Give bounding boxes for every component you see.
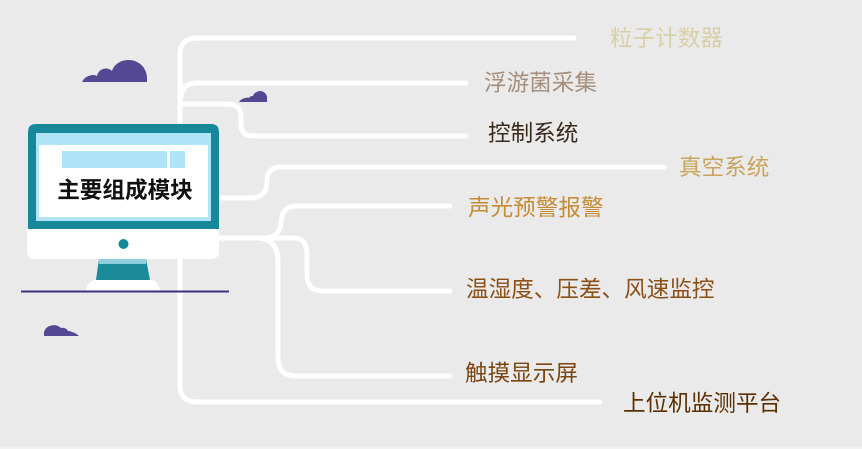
label: 控制系统: 控制系统 — [488, 121, 578, 146]
line: 声光预警报警 — [220, 206, 450, 238]
monitor icon — [27, 124, 219, 291]
line: 浮游菌采集 — [181, 83, 466, 97]
label: 声光预警报警: 声光预警报警 — [468, 196, 604, 220]
label: 上位机监测平台: 上位机监测平台 — [623, 391, 781, 416]
label: 触摸显示屏: 触摸显示屏 — [465, 361, 578, 386]
monitor bezel — [28, 124, 219, 229]
ground line — [21, 290, 229, 292]
line: 真空系统 — [221, 167, 664, 198]
cloud: small center — [239, 91, 267, 102]
power dot — [118, 239, 128, 249]
screen panel — [39, 145, 208, 217]
line: 控制系统 — [182, 104, 466, 136]
label: 粒子计数器: 粒子计数器 — [610, 26, 723, 51]
cloud: bottom left — [44, 325, 79, 336]
connector lines — [180, 38, 664, 402]
line: 粒子计数器 and 上位机监测平台 trunk — [180, 38, 600, 402]
monitor chin — [27, 229, 219, 259]
label: 真空系统: 真空系统 — [679, 155, 769, 180]
line: 温湿度、压差、风速监控 — [220, 238, 450, 291]
screen frame — [36, 133, 211, 221]
line: 触摸显示屏 — [260, 238, 450, 376]
stand highlight — [99, 259, 146, 264]
cloud: top left — [82, 60, 147, 82]
screen bar long — [62, 151, 167, 168]
label: 浮游菌采集: 浮游菌采集 — [484, 70, 597, 96]
monitor stand — [96, 259, 150, 280]
label: 温湿度、压差、风速监控: 温湿度、压差、风速监控 — [466, 277, 715, 302]
monitor title: 主要组成模块 — [57, 178, 193, 203]
stand base — [86, 280, 160, 291]
screen bar short — [170, 151, 185, 168]
